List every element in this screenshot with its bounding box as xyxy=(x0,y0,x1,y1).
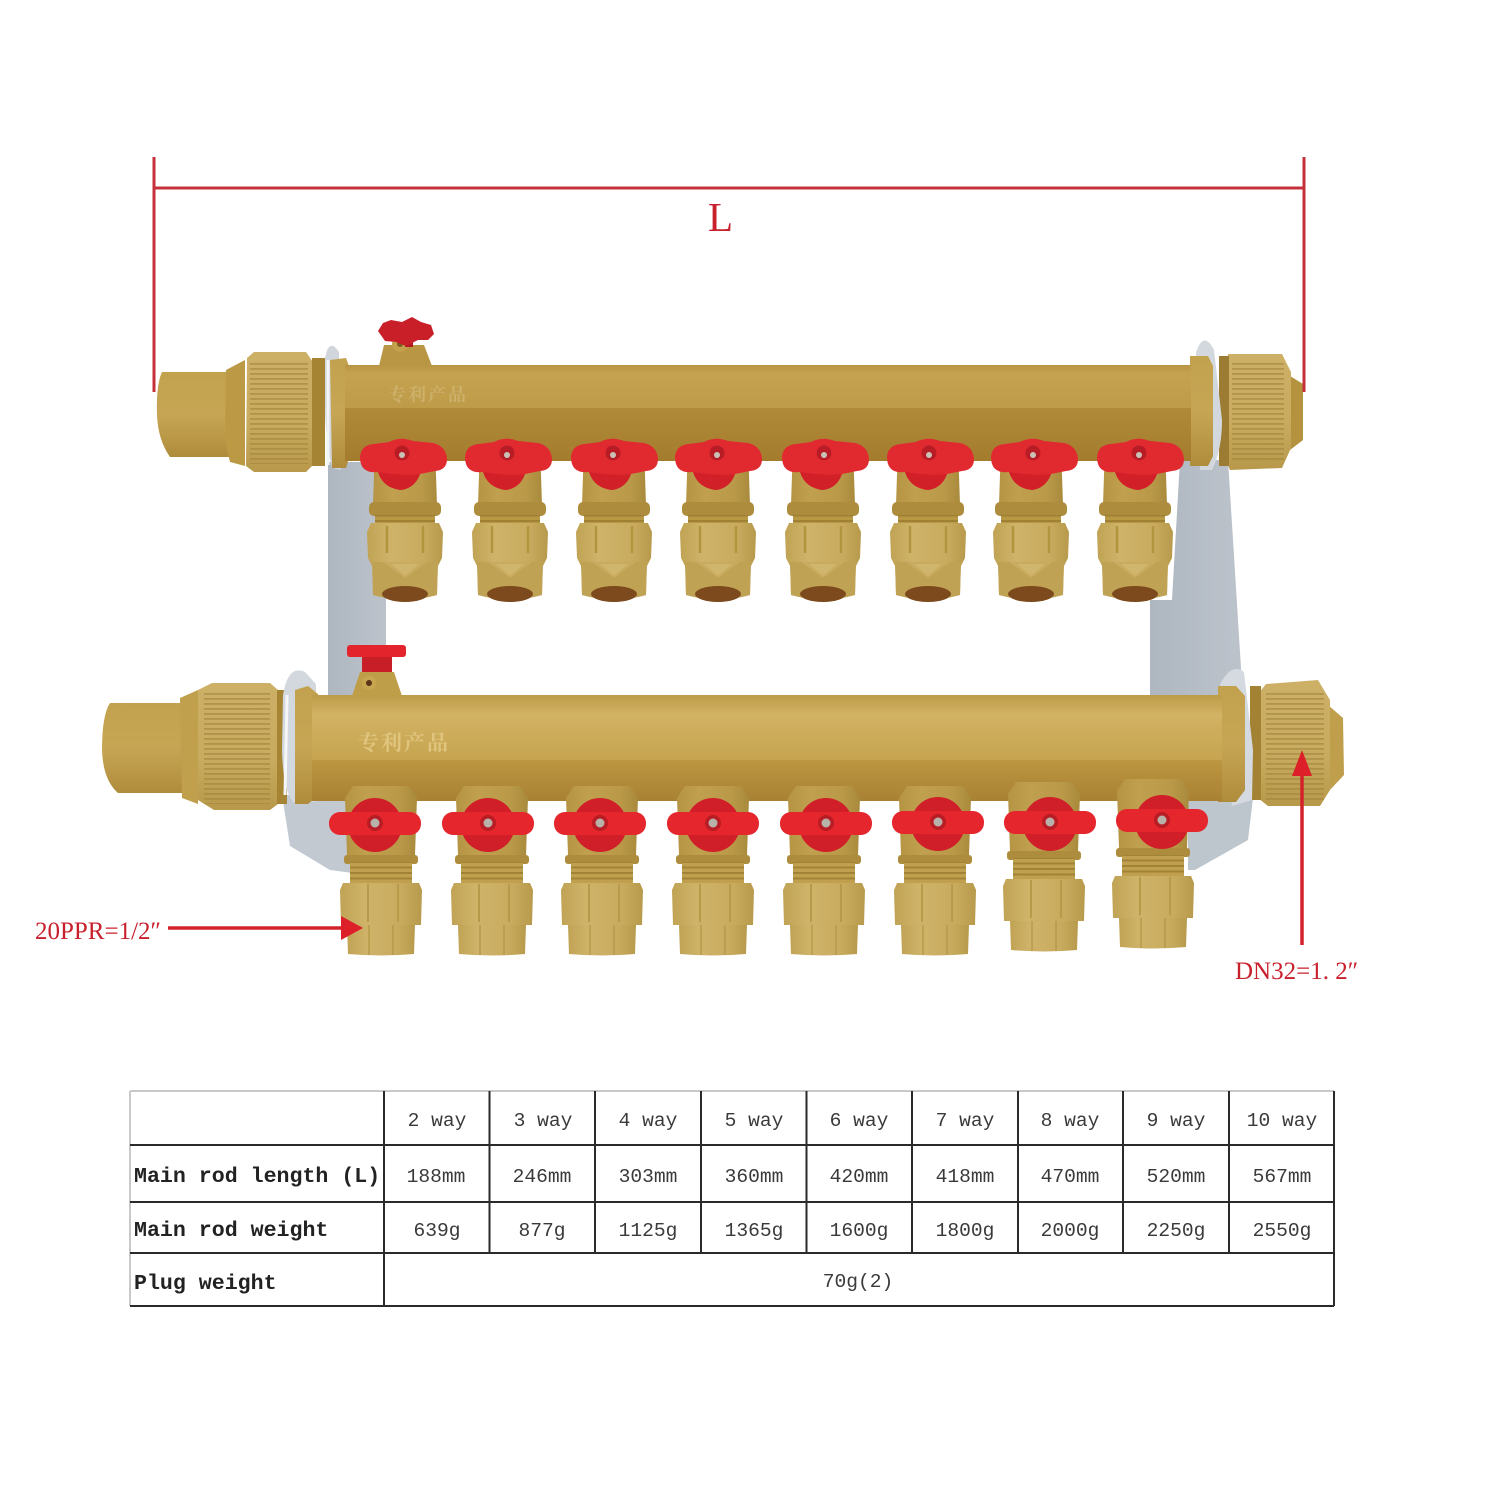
callout: 20PPR: 20PPR=1/2″ xyxy=(35,918,161,945)
callout: DN32 xyxy=(1235,750,1358,985)
outlet valve 2 xyxy=(465,439,552,602)
outlet valve 5 xyxy=(780,786,872,956)
table row: main rod length: 418mm xyxy=(936,1166,994,1188)
top manifold: left end fitting xyxy=(157,346,349,472)
callout: 20PPR xyxy=(35,916,363,945)
embossed text: top pipe: 专利产品 xyxy=(388,384,468,405)
outlet valve 6 xyxy=(892,786,984,956)
table row: plug weight: 70g(2) xyxy=(823,1271,893,1293)
outlet valve 1 xyxy=(329,786,422,956)
table row: main rod length xyxy=(134,1165,1311,1189)
table row: main rod weight: 1600g xyxy=(830,1220,888,1242)
outlet valve 8 xyxy=(1112,779,1208,948)
table row: main rod weight: 2550g xyxy=(1253,1220,1311,1242)
table row: main rod length: 188mm xyxy=(407,1166,465,1188)
table header row: 4 way xyxy=(619,1110,678,1132)
dimension label L: L xyxy=(708,194,733,240)
table row: main rod weight xyxy=(134,1219,1311,1243)
table row: main rod weight: 1800g xyxy=(936,1220,994,1242)
outlet valve 1 xyxy=(360,439,447,602)
outlet valve 7 xyxy=(991,439,1078,602)
callout: DN32: DN32=1. 2″ xyxy=(1235,958,1358,985)
bleed valve: bottom manifold xyxy=(347,645,406,696)
table row: main rod length: 470mm xyxy=(1041,1166,1099,1188)
table row: main rod weight: 1125g xyxy=(619,1220,677,1242)
outlet valve 2 xyxy=(442,786,534,956)
bottom manifold outlets xyxy=(329,779,1208,956)
bottom manifold: right end fitting xyxy=(1218,669,1344,806)
table header row: 2 way xyxy=(408,1110,467,1132)
outlet valve 5 xyxy=(782,439,869,602)
embossed text: bottom pipe: 专利产品 xyxy=(358,731,450,755)
outlet valve 3 xyxy=(571,439,658,602)
outlet valve 4 xyxy=(675,439,762,602)
table header row: 6 way xyxy=(830,1110,889,1132)
table row: main rod length: 420mm xyxy=(830,1166,888,1188)
outlet valve 6 xyxy=(887,439,974,602)
table row: plug weight xyxy=(134,1271,893,1296)
table row: main rod length: 520mm xyxy=(1147,1166,1205,1188)
table row: main rod weight: 877g xyxy=(518,1220,566,1242)
table row: main rod length: 303mm xyxy=(619,1166,677,1188)
table header row: 7 way xyxy=(936,1110,995,1132)
table row: plug weight: Plug weight xyxy=(134,1272,277,1296)
table row: main rod weight: 639g xyxy=(413,1220,461,1242)
bottom manifold pipe xyxy=(312,695,1222,801)
mounting bracket xyxy=(282,460,1253,874)
outlet valve 8 xyxy=(1097,439,1184,602)
table header row: 9 way xyxy=(1147,1110,1206,1132)
table row: main rod length: Main rod length (L) xyxy=(134,1165,380,1189)
table row: main rod weight: 2000g xyxy=(1041,1220,1099,1242)
table header row: 10 way xyxy=(1247,1110,1318,1132)
dimension line L xyxy=(154,157,1304,392)
top manifold: right end fitting xyxy=(1190,340,1303,470)
outlet valve 4 xyxy=(667,786,759,956)
table header row: 8 way xyxy=(1041,1110,1100,1132)
top manifold pipe xyxy=(345,365,1191,461)
table header row xyxy=(408,1110,1318,1132)
specification table xyxy=(130,1091,1334,1306)
outlet valve 7 xyxy=(1003,782,1096,952)
outlet valve 3 xyxy=(554,786,646,956)
table row: main rod weight: 2250g xyxy=(1147,1220,1205,1242)
table row: main rod weight: 1365g xyxy=(725,1220,783,1242)
table row: main rod length: 567mm xyxy=(1253,1166,1311,1188)
bottom manifold: left end fitting xyxy=(102,670,318,810)
table row: main rod weight: Main rod weight xyxy=(134,1219,328,1243)
bleed valve: top manifold xyxy=(378,317,434,366)
table header row: 3 way xyxy=(514,1110,573,1132)
table row: main rod length: 246mm xyxy=(513,1166,571,1188)
table header row: 5 way xyxy=(725,1110,784,1132)
table row: main rod length: 360mm xyxy=(725,1166,783,1188)
top manifold outlets xyxy=(360,439,1184,602)
